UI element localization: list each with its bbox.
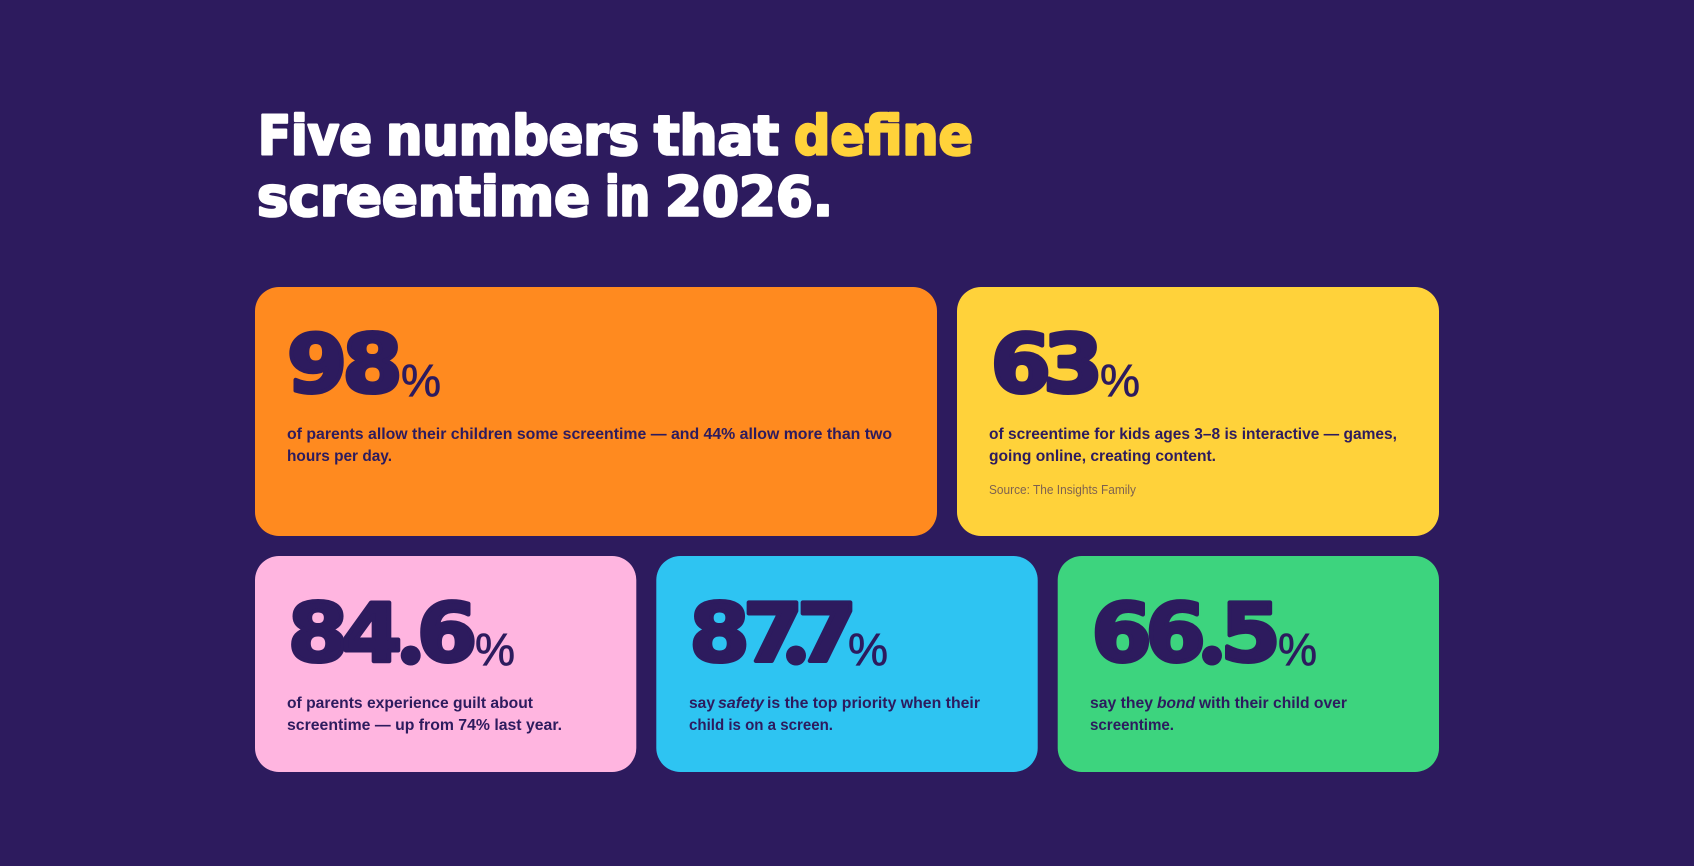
text: parents experience guilt: screentime — up from 74% last year. [287,717,562,734]
stat: 98%: % [401,355,441,406]
stat: 87.7%: % [848,624,888,675]
title: in [605,166,650,228]
text: safety top priority: child is on a screen. [689,717,833,734]
text: safety top priority [689,695,980,734]
panel: 98% of parents [255,287,937,536]
panel: 63% interactive [957,287,1439,536]
title: 2026. [665,166,833,228]
stat: 84.6%: 84.6 [288,587,477,680]
source note: Source: The Insights Family [989,482,1136,497]
text: parents experience guilt: of parents experience guilt about [287,695,534,712]
text: bond over screentime: with their child over [1198,695,1347,712]
stat: 66.5%: 66.5 [1092,587,1281,680]
text: bond over screentime: screentime. [1090,717,1174,734]
text: parents allow screentime: of parents allow their children some screentime — and 44% allow more than two [287,426,892,443]
panel: 87.7% safety [656,556,1038,772]
title: screentime [257,166,590,228]
stat: 63%: 63 [991,318,1103,411]
text: interactive screentime: going online, creating content. [989,448,1216,465]
text: parents allow screentime: hours per day. [287,448,392,465]
text: parents experience guilt [287,695,562,734]
text: safety top priority: safety [718,695,765,712]
text: bond over screentime: say they [1090,695,1153,712]
text: safety top priority: is the top priority when their [767,695,980,712]
text: bond over screentime [1090,695,1347,734]
stat: 98%: 98 [287,318,402,411]
title: define [794,104,973,168]
stat: 66.5%: % [1278,624,1317,675]
text: safety top priority: say [689,695,715,712]
title [257,104,973,228]
stat: 87.7%: 87.7 [690,587,857,680]
panel: 84.6% guilt [255,556,636,772]
text: parents allow screentime [287,426,892,465]
title: numbers [386,104,639,168]
text: bond over screentime: bond [1157,695,1196,712]
title: Five [258,104,372,168]
title: that [654,104,779,168]
panel: 66.5% bond [1058,556,1439,772]
text: interactive screentime [989,426,1397,465]
text: interactive screentime: of screentime for kids ages 3–8 is interactive — games, [989,426,1397,443]
stat: 63%: % [1100,355,1140,406]
stat: 84.6%: % [475,624,515,675]
